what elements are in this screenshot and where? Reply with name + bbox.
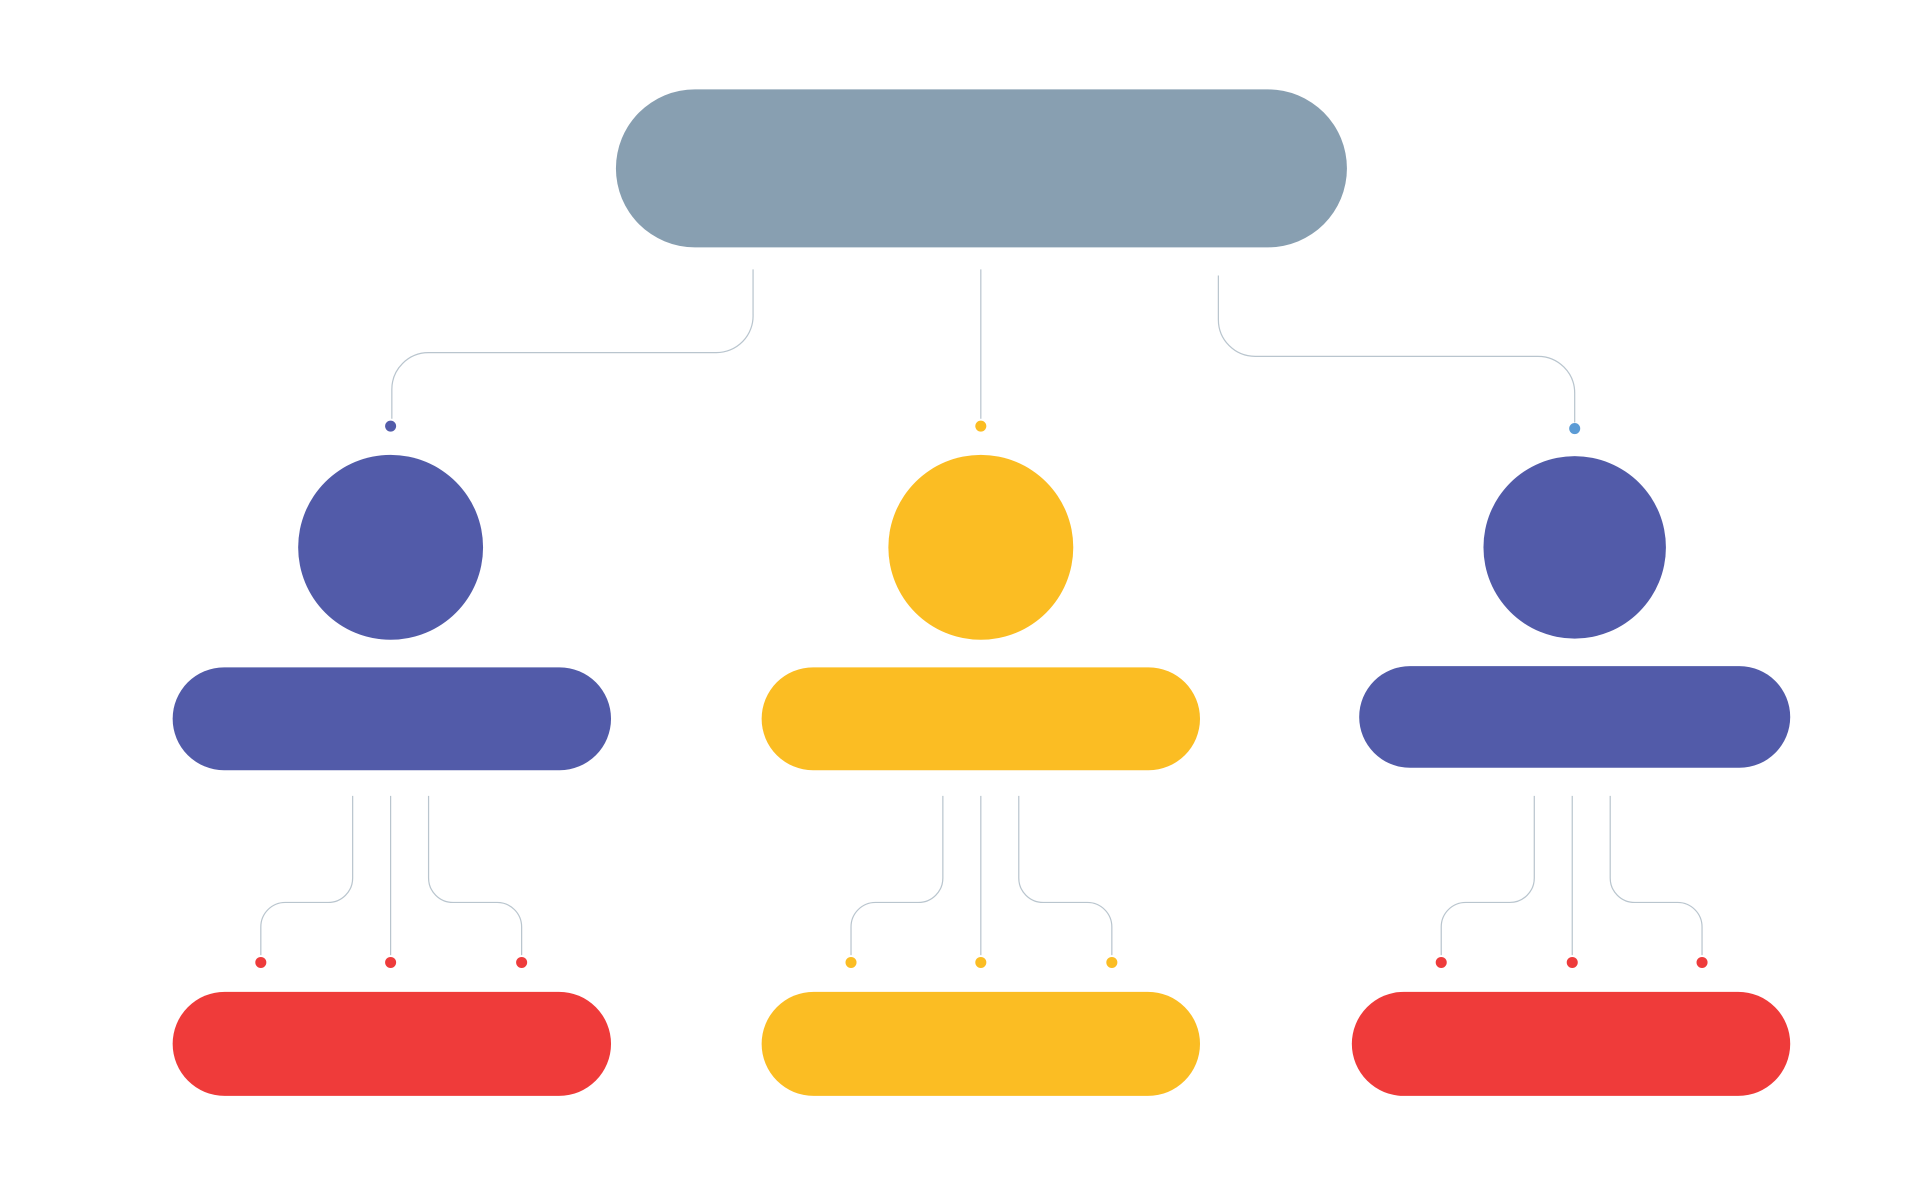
sub connectors left — [261, 796, 522, 955]
branch center — [762, 455, 1200, 1096]
circle right — [1483, 456, 1666, 639]
circle center — [888, 455, 1073, 640]
circle left — [298, 455, 483, 640]
branch left — [173, 455, 611, 1096]
connector dots top — [385, 421, 1580, 434]
sub connectors right — [1441, 796, 1702, 955]
connectors from top — [392, 269, 1575, 422]
top banner — [616, 89, 1347, 247]
mid pill center — [762, 667, 1200, 770]
sub connectors center — [851, 796, 1112, 955]
mid pill left — [173, 667, 611, 770]
mid pill right — [1359, 666, 1790, 768]
branch right — [1352, 456, 1790, 1096]
bottom pill right — [1352, 992, 1790, 1096]
bottom pill center — [762, 992, 1200, 1096]
bottom pill left — [173, 992, 611, 1096]
